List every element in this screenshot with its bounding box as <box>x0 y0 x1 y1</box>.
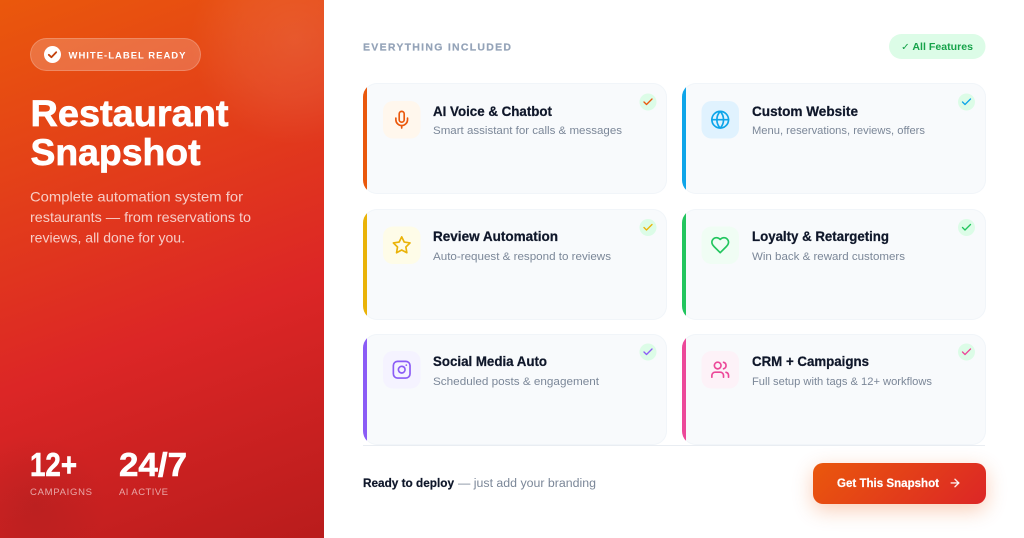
hero description <box>30 190 251 246</box>
card title: Loyalty & Retargeting <box>752 228 888 244</box>
stat: AI active: 24/7 <box>119 446 187 483</box>
icon: check <box>640 344 656 360</box>
card title: Review Automation <box>433 228 558 244</box>
card: AI voice and chatbot <box>363 83 667 194</box>
icon: check <box>640 94 656 110</box>
card title: Custom Website <box>752 103 858 119</box>
icon: arrow right <box>951 479 959 487</box>
footer note: Ready to deploy <box>363 478 455 490</box>
button label: Get This Snapshot <box>837 478 939 490</box>
card description: Full setup with tags & 12+ workflows <box>752 376 932 388</box>
title <box>30 93 228 173</box>
stat: AI active <box>119 446 187 498</box>
pill: all features: ✓ All Features <box>901 42 974 53</box>
pill: all features <box>889 34 986 59</box>
icon: users <box>701 351 738 388</box>
hero description: reviews, all done for you. <box>30 230 185 246</box>
icon: check <box>958 219 974 236</box>
card: CRM and campaigns <box>682 334 986 444</box>
icon: star <box>383 226 420 264</box>
icon: instagram <box>383 351 420 388</box>
stat: campaigns: 12+ <box>30 446 77 483</box>
icon: check <box>958 344 974 360</box>
card description: Auto-request & respond to reviews <box>433 251 611 263</box>
icon: check <box>958 94 974 110</box>
card description: Scheduled posts & engagement <box>433 376 600 388</box>
hero description: restaurants — from reservations to <box>30 210 251 225</box>
card: social media auto <box>363 334 667 444</box>
card: custom website <box>682 83 986 194</box>
card: review automation <box>363 209 667 320</box>
section heading: EVERYTHING INCLUDED <box>363 42 511 54</box>
icon: globe <box>701 101 738 138</box>
card: loyalty and retargeting <box>682 209 986 320</box>
title: Snapshot <box>30 132 200 173</box>
card description: Menu, reservations, reviews, offers <box>752 125 925 137</box>
footer note <box>363 478 596 490</box>
icon: microphone <box>383 101 420 138</box>
footer note: — just add your branding <box>458 478 596 490</box>
icon: badge check <box>44 46 61 63</box>
badge: white-label ready <box>30 38 200 70</box>
title: Restaurant <box>30 93 228 134</box>
icon: heart <box>701 226 738 264</box>
badge label: WHITE-LABEL READY <box>68 50 186 62</box>
icon: check <box>640 219 656 236</box>
stat: campaigns <box>30 446 92 498</box>
panel: hero <box>0 0 324 538</box>
card title: CRM + Campaigns <box>752 353 869 369</box>
stat: AI active: AI ACTIVE <box>119 487 168 498</box>
card description: Smart assistant for calls & messages <box>433 125 622 137</box>
card title: AI Voice & Chatbot <box>433 103 552 119</box>
card description: Win back & reward customers <box>752 251 905 263</box>
stat: campaigns: CAMPAIGNS <box>30 487 92 498</box>
hero description: Complete automation system for <box>30 190 244 204</box>
button: get this snapshot <box>813 463 986 504</box>
card title: Social Media Auto <box>433 353 547 369</box>
